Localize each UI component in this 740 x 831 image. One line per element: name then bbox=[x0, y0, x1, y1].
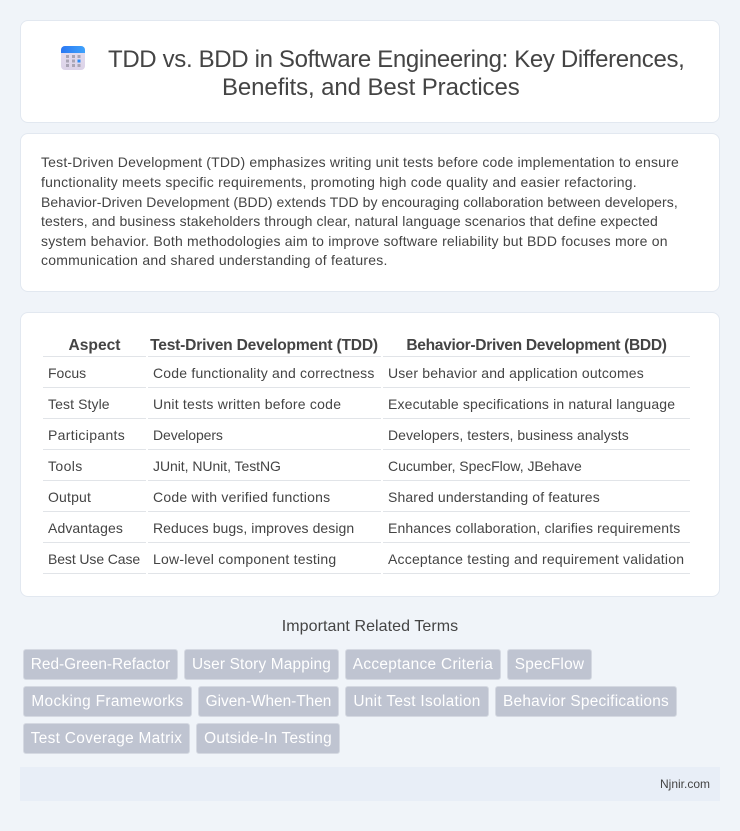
row: Participants: Participants bbox=[48, 427, 125, 443]
tag: Acceptance Criteria bbox=[353, 656, 493, 673]
text block: introduction: Test-Driven Development (TDD) emphasizes writing unit tests before code implementation to ensure bbox=[41, 154, 679, 170]
icon: calendar bbox=[61, 46, 85, 70]
row: Focus: User behavior and application outcomes bbox=[388, 365, 644, 381]
row: Advantages: Advantages bbox=[48, 520, 123, 536]
row: Best Use Case: Best Use Case bbox=[48, 551, 140, 567]
row: Output: Code with verified functions bbox=[153, 489, 330, 505]
row: Participants: Developers, testers, business analysts bbox=[388, 427, 629, 443]
row: Best Use Case bbox=[48, 551, 684, 567]
text block: introduction: functionality meets specific requirements, promoting high code quality and easier refactoring. bbox=[41, 174, 637, 190]
tag bbox=[345, 649, 501, 680]
tag bbox=[507, 649, 592, 680]
row: Focus: Code functionality and correctness bbox=[153, 365, 375, 381]
row: Advantages: Enhances collaboration, clarifies requirements bbox=[388, 520, 680, 536]
row: Best Use Case: Acceptance testing and requirement validation bbox=[388, 551, 684, 567]
tag: Mocking Frameworks bbox=[31, 693, 184, 710]
row: Participants: Developers bbox=[153, 427, 223, 443]
row: Output: Shared understanding of features bbox=[388, 489, 600, 505]
tag bbox=[23, 723, 190, 754]
panel: comparison table bbox=[20, 312, 720, 597]
row: Tools: Cucumber, SpecFlow, JBehave bbox=[388, 458, 582, 474]
footer bbox=[20, 767, 720, 801]
tag bbox=[23, 686, 192, 717]
panel: introduction bbox=[20, 133, 720, 292]
tag: Red-Green-Refactor bbox=[31, 656, 170, 673]
row: Tools bbox=[48, 458, 582, 474]
row: Test Style bbox=[48, 396, 675, 412]
heading: related terms: Important Related Terms bbox=[282, 618, 458, 635]
row: Advantages: Reduces bugs, improves design bbox=[153, 520, 354, 536]
row: Tools: Tools bbox=[48, 458, 83, 474]
row: Focus bbox=[48, 365, 644, 381]
row: Output bbox=[48, 489, 600, 505]
title: Benefits, and Best Practices bbox=[222, 74, 520, 101]
tag: Outside-In Testing bbox=[204, 730, 332, 747]
panel: header bbox=[20, 20, 720, 123]
text block: introduction: communication and shared understanding of features. bbox=[41, 252, 388, 268]
tag bbox=[345, 686, 489, 717]
text block: introduction bbox=[41, 154, 679, 268]
footer credit: Njnir.com bbox=[660, 777, 710, 791]
tag bbox=[23, 649, 178, 680]
tag bbox=[196, 723, 340, 754]
tag: Given-When-Then bbox=[206, 693, 331, 710]
table header row: Aspect bbox=[68, 337, 120, 354]
panel: related term tags bbox=[23, 649, 677, 754]
row: Participants bbox=[48, 427, 629, 443]
table: TDD vs BDD comparison bbox=[43, 337, 690, 574]
tag bbox=[495, 686, 677, 717]
row: Tools: JUnit, NUnit, TestNG bbox=[153, 458, 281, 474]
title bbox=[108, 46, 684, 101]
tag bbox=[184, 649, 339, 680]
table header row: Behavior-Driven Development (BDD) bbox=[406, 337, 667, 354]
row: Test Style: Executable specifications in natural language bbox=[388, 396, 675, 412]
row: Output: Output bbox=[48, 489, 91, 505]
tag: User Story Mapping bbox=[192, 656, 331, 673]
row: Test Style: Unit tests written before code bbox=[153, 396, 341, 412]
table header row bbox=[68, 337, 667, 354]
text block: introduction: system behavior. Both methodologies aim to improve software reliability but BDD focuses more on bbox=[41, 233, 668, 249]
text block: introduction: Behavior-Driven Development (BDD) extends TDD by encouraging collaboration between developers, bbox=[41, 194, 678, 210]
tag: SpecFlow bbox=[515, 656, 584, 673]
row: Advantages bbox=[48, 520, 680, 536]
table header row: Test-Driven Development (TDD) bbox=[150, 337, 378, 354]
row: Test Style: Test Style bbox=[48, 396, 110, 412]
tag: Unit Test Isolation bbox=[353, 693, 481, 710]
tag bbox=[198, 686, 339, 717]
row: Focus: Focus bbox=[48, 365, 86, 381]
row: Best Use Case: Low-level component testing bbox=[153, 551, 336, 567]
text block: introduction: testers, and business stakeholders through clear, natural language scenarios that define expected bbox=[41, 213, 658, 229]
tag: Behavior Specifications bbox=[503, 693, 669, 710]
tag: Test Coverage Matrix bbox=[31, 730, 182, 747]
title: TDD vs. BDD in Software Engineering: Key Differences, bbox=[108, 46, 684, 73]
